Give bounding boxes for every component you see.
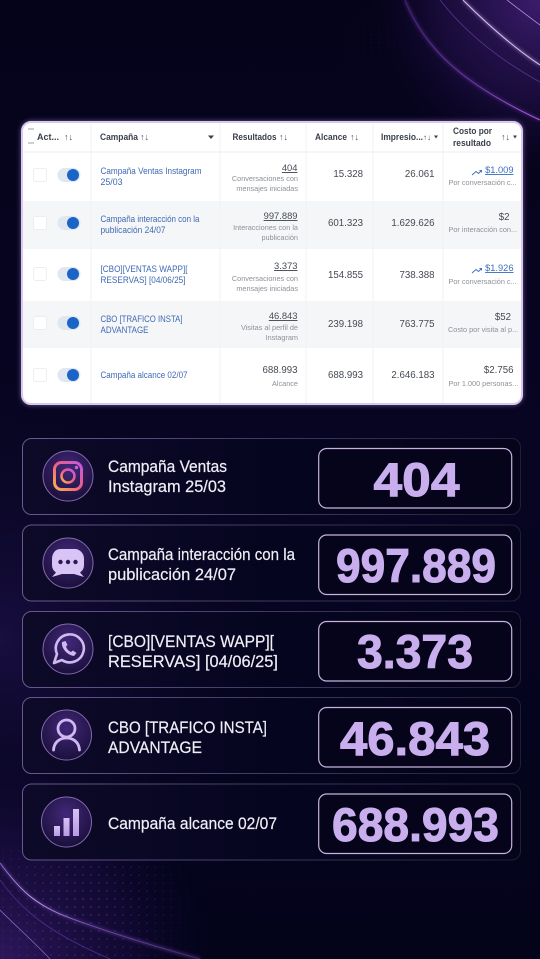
panel: results table bbox=[22, 122, 522, 404]
card 3 title: [CBO][VENTAS WAPP][ bbox=[108, 632, 274, 651]
row 2: Campaña interacción: 997.889 bbox=[264, 210, 298, 221]
table header: Impresio... bbox=[381, 132, 423, 142]
card 4 title bbox=[108, 718, 267, 757]
row 2: Campaña interacción: 1.629.626 bbox=[391, 218, 434, 229]
row 2: Campaña interacción: 601.323 bbox=[328, 218, 363, 229]
row 5: Campaña alcance: Por 1.000 personas... bbox=[448, 379, 518, 388]
card 4: CBO trafico insta bbox=[22, 698, 520, 774]
card 3 value box bbox=[319, 622, 512, 681]
row 4: CBO trafico insta: CBO [TRAFICO INSTA] bbox=[100, 314, 182, 325]
table header: Costo por bbox=[453, 126, 492, 136]
table header: ↑↓ bbox=[501, 132, 510, 142]
row 1: Campaña Ventas Instagram: mensajes iniciadas bbox=[236, 184, 298, 193]
row 4: CBO trafico insta bbox=[34, 310, 518, 342]
card 5 title: Campaña alcance 02/07 bbox=[108, 814, 277, 833]
row 1: Campaña Ventas Instagram: 25/03 bbox=[100, 177, 122, 188]
table header: ↑↓ bbox=[140, 132, 149, 142]
row 3: CBO ventas wapp bbox=[34, 260, 517, 293]
row 3: CBO ventas wapp: $1.926 bbox=[485, 263, 514, 273]
row 2: Campaña interacción: Por interacción con... bbox=[448, 225, 517, 234]
card 1 value box: 404 bbox=[374, 453, 460, 506]
card 3 title bbox=[108, 632, 278, 671]
row 2: Campaña interacción: publicación bbox=[261, 233, 298, 242]
table header: Campaña bbox=[100, 132, 139, 142]
row 4: CBO trafico insta: Costo por visita al p... bbox=[448, 325, 518, 334]
row 4: CBO trafico insta: Visitas al perfil de bbox=[241, 323, 298, 332]
table header: resultado bbox=[453, 138, 491, 148]
row 1: Campaña Ventas Instagram bbox=[34, 162, 517, 193]
table header: Act... bbox=[37, 132, 59, 142]
row 4: CBO trafico insta: 239.198 bbox=[328, 319, 363, 330]
card 3: CBO ventas wapp bbox=[22, 612, 520, 688]
card 2 title: publicación 24/07 bbox=[108, 565, 236, 584]
table header: Resultados bbox=[232, 132, 276, 142]
row 2: Campaña interacción: Interacciones con la bbox=[233, 223, 299, 232]
row 1: Campaña Ventas Instagram: 15.328 bbox=[333, 169, 363, 180]
row 5: Campaña alcance: 688.993 bbox=[262, 365, 298, 376]
row 5: Campaña alcance: 2.646.183 bbox=[391, 370, 434, 381]
table header: ↑↓ bbox=[279, 132, 288, 142]
row 5: Campaña alcance: Alcance bbox=[272, 379, 298, 388]
card 2 title: Campaña interacción con la bbox=[108, 545, 295, 564]
row 3: CBO ventas wapp: Conversaciones con bbox=[232, 274, 298, 283]
row 2: Campaña interacción bbox=[34, 210, 517, 242]
table header: ↑↓ bbox=[423, 133, 431, 142]
icon: whatsapp bbox=[43, 624, 93, 674]
card 3 title: RESERVAS] [04/06/25] bbox=[108, 652, 278, 671]
table header: Alcance bbox=[315, 132, 347, 142]
row 5: Campaña alcance: $2.756 bbox=[484, 365, 514, 376]
row 3: CBO ventas wapp: [CBO][VENTAS WAPP][ bbox=[100, 264, 188, 275]
row 1: Campaña Ventas Instagram: Conversaciones con bbox=[232, 174, 298, 183]
row 1: Campaña Ventas Instagram: 404 bbox=[282, 162, 298, 173]
card 1 title: Instagram 25/03 bbox=[108, 477, 226, 496]
card 4 title: CBO [TRAFICO INSTA] bbox=[108, 718, 267, 737]
icon: chat bubble bbox=[43, 538, 93, 588]
row 5: Campaña alcance: 688.993 bbox=[328, 370, 363, 381]
row 3: CBO ventas wapp: 738.388 bbox=[399, 270, 434, 281]
row 4: CBO trafico insta: 46.843 bbox=[269, 310, 298, 321]
card 5: Campaña alcance bbox=[22, 784, 520, 860]
row 4: CBO trafico insta: $52 bbox=[495, 312, 511, 323]
card 1 value box bbox=[319, 448, 512, 508]
table header bbox=[28, 126, 517, 148]
card 1 title: Campaña Ventas bbox=[108, 457, 227, 476]
row 5: Campaña alcance bbox=[34, 365, 518, 388]
row 4: CBO trafico insta: ADVANTAGE bbox=[100, 325, 148, 336]
table header: ↑↓ bbox=[350, 132, 359, 142]
row 5: Campaña alcance: Campaña alcance 02/07 bbox=[100, 370, 188, 381]
card 4 title: ADVANTAGE bbox=[108, 738, 202, 757]
card 2: Campaña interacción bbox=[22, 525, 520, 601]
row 1: Campaña Ventas Instagram: 26.061 bbox=[405, 169, 434, 180]
card 1: Campaña Ventas Instagram bbox=[22, 438, 520, 514]
card 1 title bbox=[108, 457, 227, 496]
row 3: CBO ventas wapp: Por conversación c... bbox=[448, 277, 517, 286]
card 5 value box: 688.993 bbox=[332, 798, 499, 851]
row 3: CBO ventas wapp: mensajes iniciadas bbox=[236, 284, 298, 293]
icon: bar chart bbox=[42, 797, 92, 847]
icon: person bbox=[42, 710, 92, 760]
row 1: Campaña Ventas Instagram: Campaña Ventas Instagram bbox=[100, 166, 202, 177]
icon: instagram bbox=[43, 451, 93, 501]
card 4 value box: 46.843 bbox=[340, 712, 490, 765]
row 3: CBO ventas wapp: 3.373 bbox=[274, 260, 298, 271]
card 2 value box: 997.889 bbox=[336, 539, 496, 592]
row 3: CBO ventas wapp: RESERVAS] [04/06/25] bbox=[100, 275, 186, 286]
row 1: Campaña Ventas Instagram: $1.009 bbox=[485, 165, 514, 175]
row 2: Campaña interacción: Campaña interacción con la bbox=[100, 214, 200, 225]
row 2: Campaña interacción: publicación 24/07 bbox=[100, 225, 166, 236]
card 4 value box bbox=[319, 708, 512, 767]
card 3 value box: 3.373 bbox=[357, 625, 473, 678]
card 2 title bbox=[108, 545, 295, 584]
row 3: CBO ventas wapp: 154.855 bbox=[328, 270, 363, 281]
row 4: CBO trafico insta: 763.775 bbox=[399, 319, 434, 330]
row 1: Campaña Ventas Instagram: Por conversación c... bbox=[448, 178, 517, 187]
row 4: CBO trafico insta: Instagram bbox=[266, 333, 298, 342]
table header: ↑↓ bbox=[64, 132, 73, 142]
row 2: Campaña interacción: $2 bbox=[499, 212, 510, 223]
